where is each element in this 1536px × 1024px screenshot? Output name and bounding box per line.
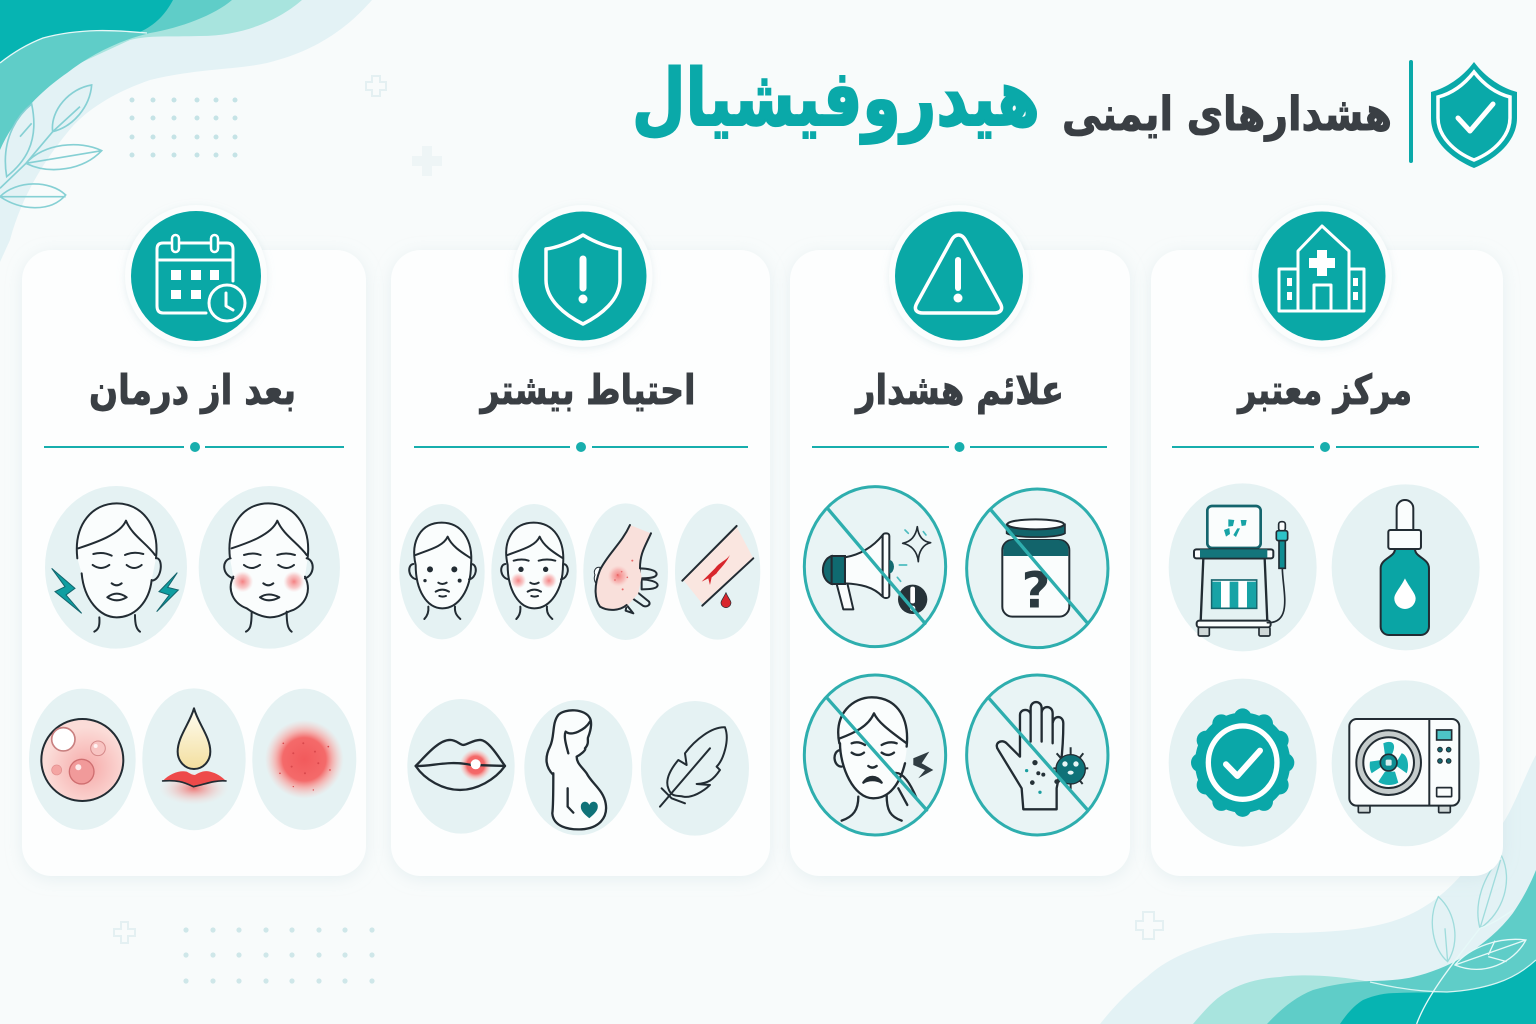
icon: spotted face: [399, 504, 485, 639]
icon: no unknown product jar: [967, 489, 1108, 648]
top-left decorative waves: [0, 0, 372, 262]
icon: oil drop on irritated lip: [142, 688, 246, 830]
icon: blushing face: [491, 504, 577, 639]
icon: hand with rash: [583, 503, 668, 640]
panel: after treatment: [22, 205, 366, 876]
card background: [790, 250, 1130, 876]
divider: [1172, 442, 1479, 452]
divider: [414, 442, 748, 452]
icon: feather: [641, 701, 749, 836]
heading: بعد از درمان: [89, 366, 296, 414]
icon: alert shield badge: [512, 205, 652, 347]
icons grid: warning signs: [804, 487, 1108, 835]
icon: swollen red cheeks face: [199, 486, 340, 649]
title: safety warnings: هشدارهای ایمنی: [1062, 87, 1392, 142]
card background: [391, 250, 770, 876]
icons grid: trusted center: [1169, 483, 1480, 847]
icon: hospital badge: [1252, 205, 1392, 347]
icon: no megaphone: [804, 487, 946, 647]
icons grid: extra caution: [399, 503, 760, 836]
icons grid: after treatment: [29, 486, 356, 830]
title: hydrafacial: هیدروفیشیال: [632, 54, 1040, 144]
card background: [22, 250, 366, 876]
header: [632, 54, 1517, 168]
bottom-right decorative waves: [1100, 755, 1536, 1024]
panel: warning signs: [790, 205, 1130, 876]
icon: face with pain bolts: [45, 486, 187, 649]
heading: علائم هشدار: [854, 366, 1064, 414]
icon: no infected hand: [967, 675, 1108, 835]
icon: lip sore: [407, 699, 515, 834]
bottom-right leaves: [1417, 856, 1526, 1024]
icon: hydrafacial machine: [1169, 483, 1317, 651]
header divider: [1409, 60, 1413, 163]
icon: warning triangle badge: [889, 205, 1029, 347]
card background: [1151, 250, 1503, 876]
icon: skin blisters: [29, 689, 136, 830]
icon: autoclave: [1332, 680, 1480, 846]
panel: trusted center: [1151, 205, 1503, 876]
icon: no pain face: [804, 675, 946, 835]
icon: serum bottle: [1332, 484, 1480, 650]
divider: [812, 442, 1107, 452]
heading: احتیاط بیشتر: [479, 366, 696, 414]
icon: no unknown product jar: ?: [1021, 561, 1050, 619]
panel: extra caution: [391, 205, 770, 876]
icon: certified badge: [1169, 679, 1317, 847]
icon: pregnant woman: [524, 700, 632, 835]
dot grid top-left: [130, 98, 238, 158]
decorative crosses: [114, 76, 1163, 943]
top-left leaves: [0, 85, 102, 208]
icon: calendar clock badge: [125, 205, 267, 347]
heading: مرکز معتبر: [1236, 366, 1412, 414]
divider: [44, 442, 344, 452]
icon: bleeding wound: [675, 504, 760, 640]
icon: red inflamed skin: [252, 689, 356, 830]
icon: header shield with check: [1431, 62, 1517, 168]
dot grid bottom-left: [183, 927, 375, 984]
